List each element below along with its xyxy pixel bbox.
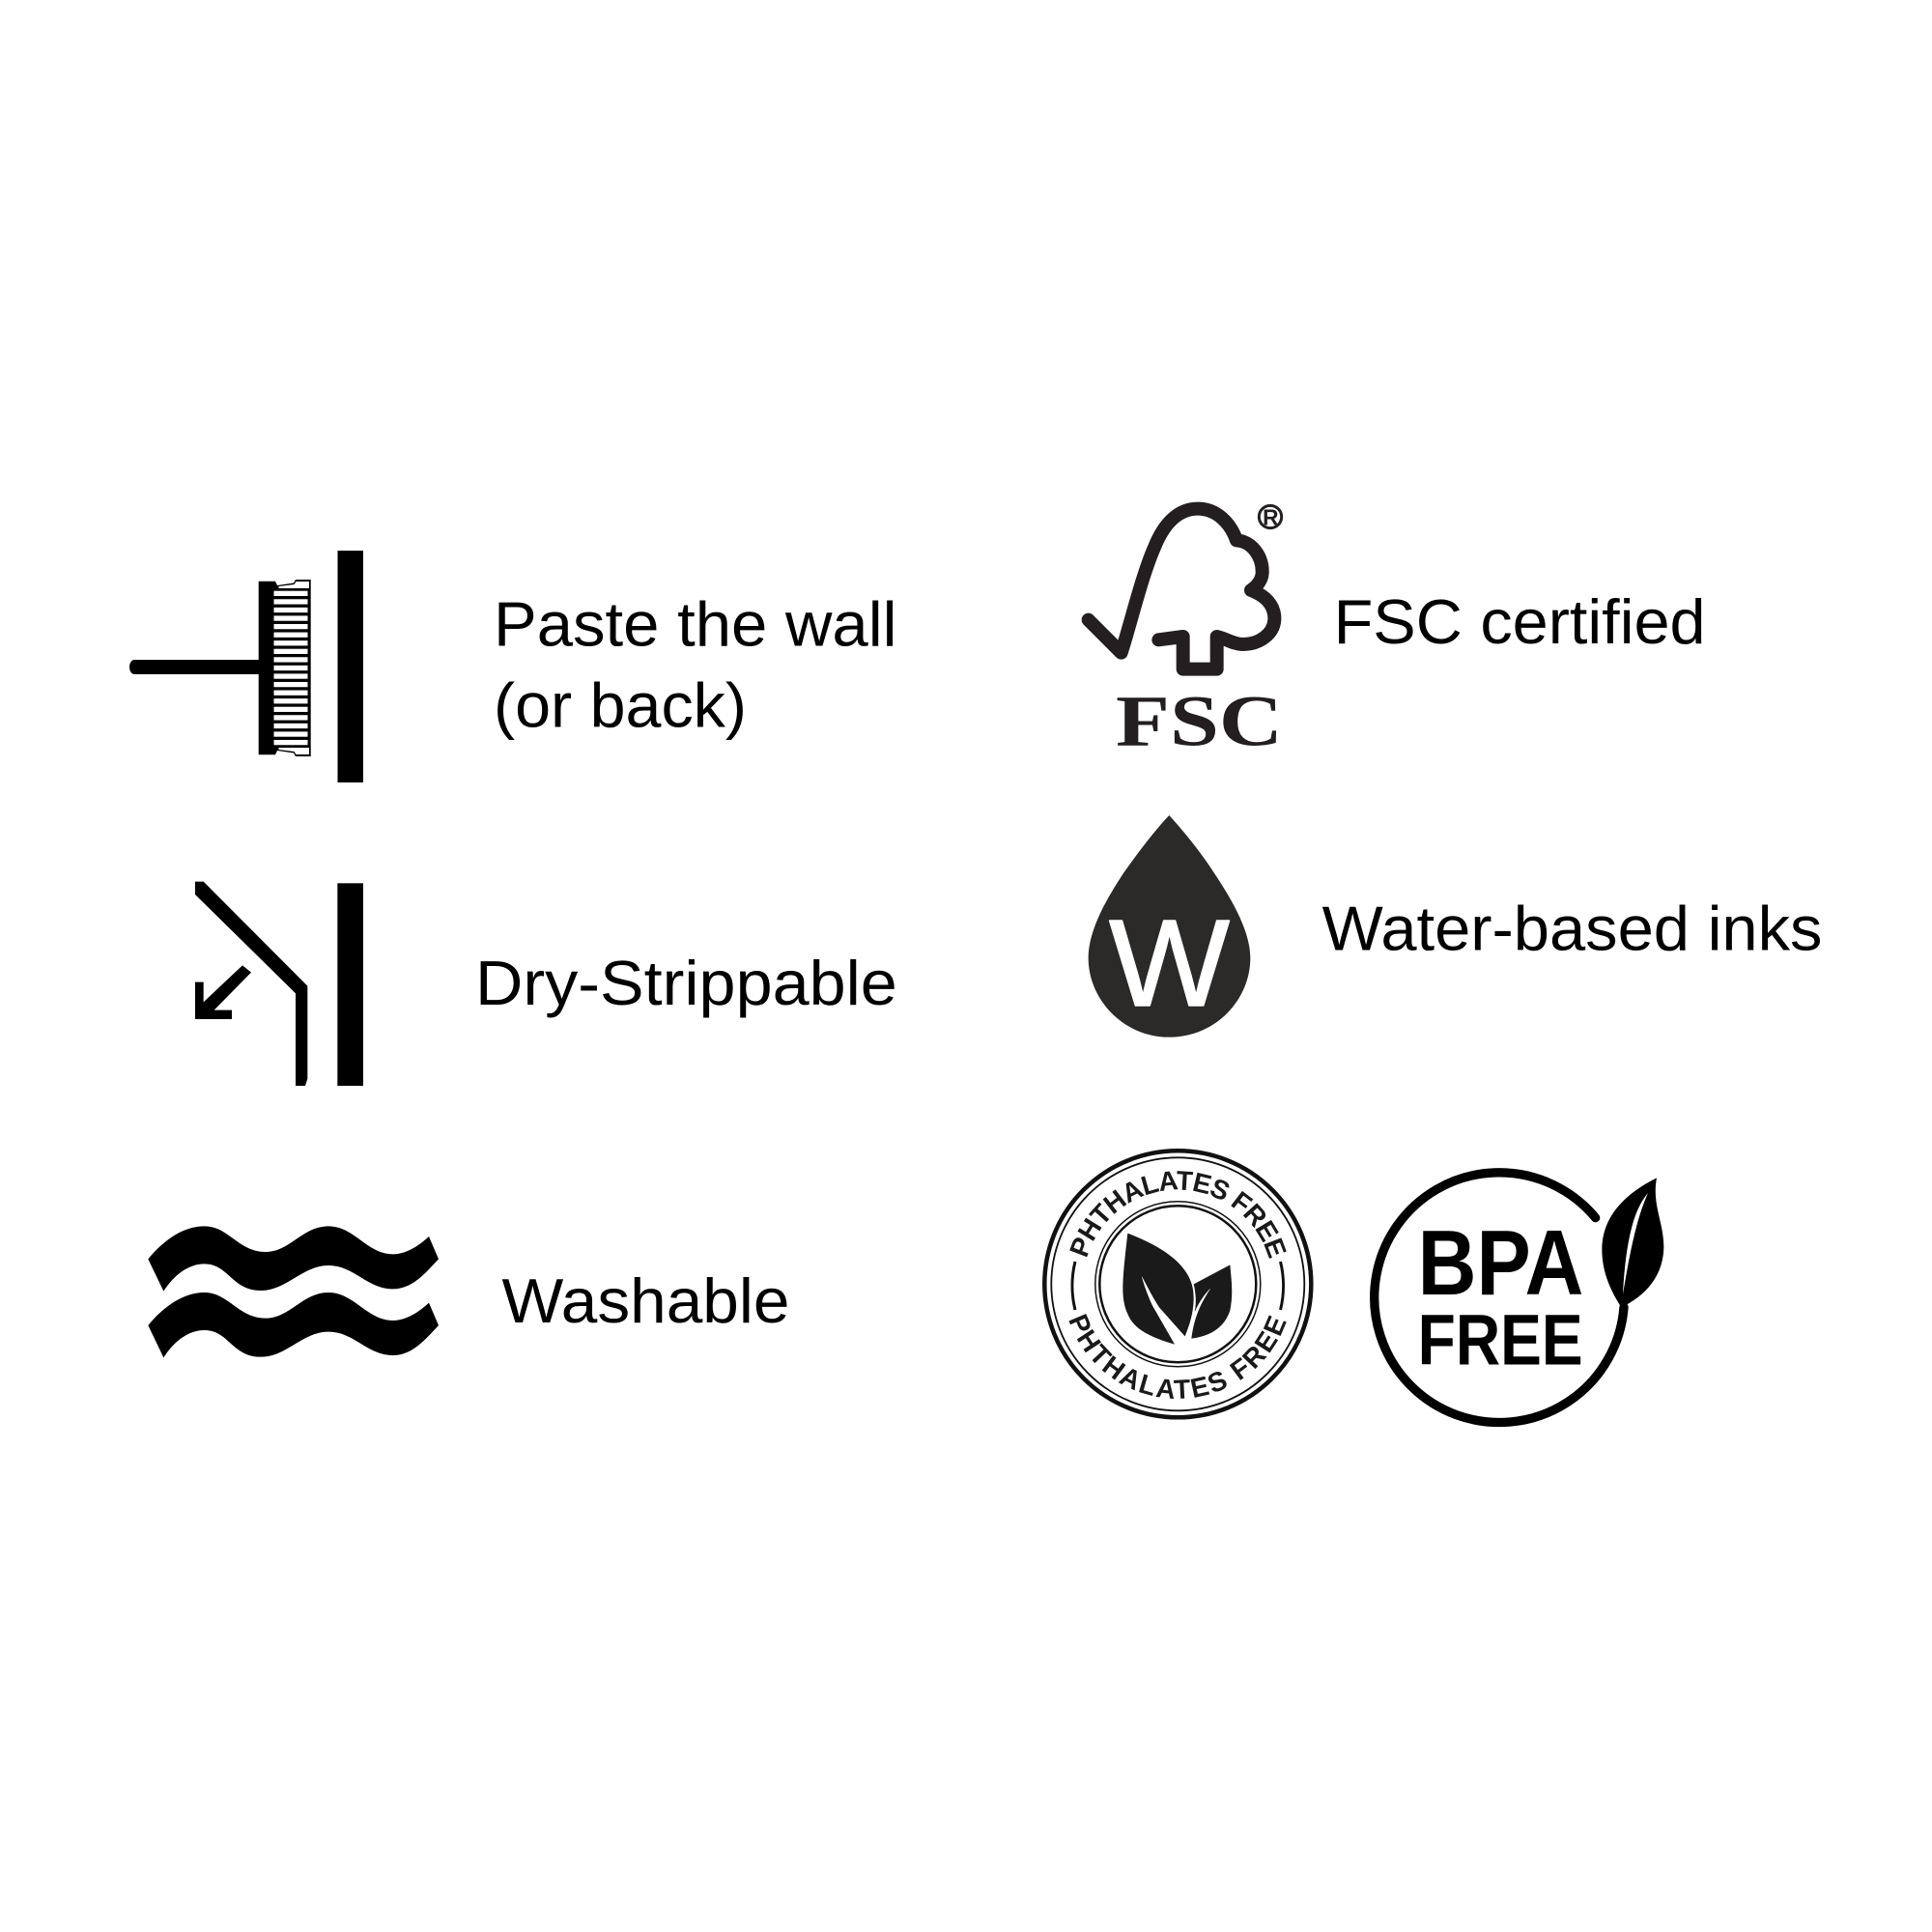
icon: water drop with W: [1089, 815, 1250, 1037]
text: FREE: FREE: [1418, 1300, 1583, 1380]
icon: leaf: [1602, 1178, 1663, 1307]
text: phthalates free bottom: PHTHALATES FREE: [1068, 1314, 1287, 1399]
icon: brush against wall: [129, 551, 363, 782]
panel: bpa free badge: [1375, 1173, 1663, 1423]
panel: water-based inks: [1089, 815, 1822, 1037]
text: BPA: BPA: [1418, 1211, 1583, 1315]
label: paste the wall: [494, 589, 896, 740]
icon: two leaves: [1122, 1234, 1232, 1345]
icon: water drop with W: W: [1109, 895, 1230, 1033]
label: paste the wall: (or back): [494, 670, 747, 740]
icon: fsc tree check mark logo: FSC: [1116, 682, 1283, 761]
label: water-based inks: Water-based inks: [1322, 893, 1822, 964]
icon: fsc tree check mark logo: R: [1263, 504, 1279, 529]
icon: open circle: [1375, 1173, 1624, 1423]
panel: dry-strippable: [195, 882, 897, 1086]
label: dry-strippable: Dry-Strippable: [475, 948, 897, 1018]
icon: fsc tree check mark logo: [1089, 504, 1283, 761]
icon: water waves: [148, 1226, 439, 1357]
panel: washable: [148, 1226, 790, 1357]
icon: badge rings: [1044, 1151, 1311, 1417]
panel: paste the wall: [129, 551, 896, 782]
text: phthalates free top: PHTHALATES FREE: [1069, 1171, 1287, 1259]
label: washable: Washable: [502, 1265, 790, 1336]
panel: phthalates free badge: [1042, 1149, 1314, 1420]
icon: paper peeling from wall: [195, 882, 363, 1086]
panel: fsc certified: [1089, 504, 1706, 761]
label: fsc certified: FSC certified: [1334, 586, 1706, 657]
label: paste the wall: Paste the wall: [494, 589, 896, 659]
